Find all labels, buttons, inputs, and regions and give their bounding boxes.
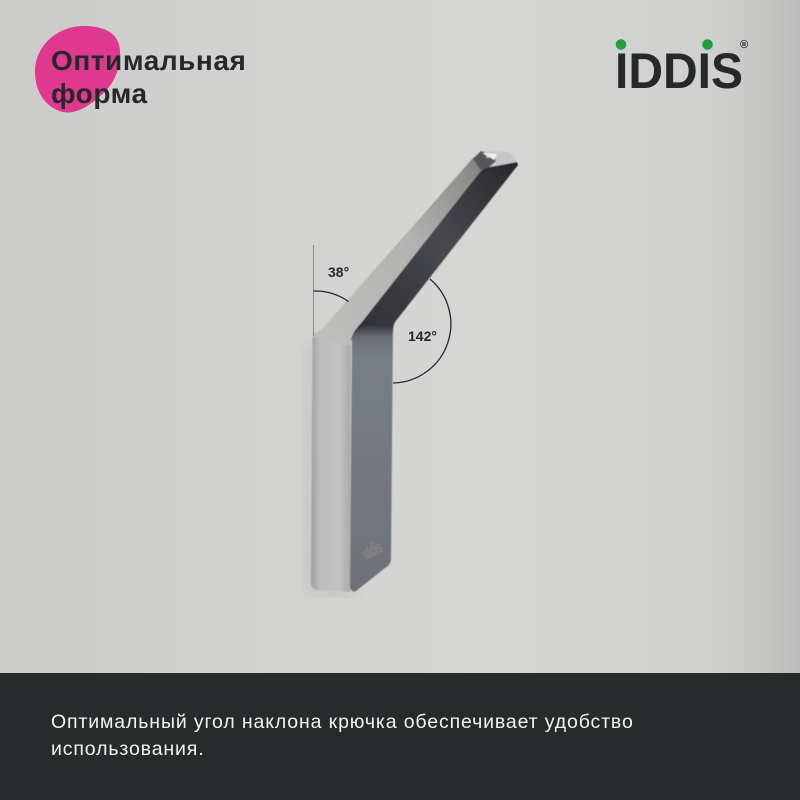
pink blob behind heading (35, 26, 120, 112)
angle annotation: 142 degrees: 142° (408, 328, 437, 344)
logo: IDDIS: ® (740, 39, 748, 51)
footer caption: использования. (51, 738, 205, 760)
hook dark arm face (351, 162, 518, 340)
hook side plate (311, 337, 351, 592)
logo: IDDIS: IDDIS (615, 43, 743, 99)
hook tip (476, 151, 517, 167)
hook engraved logo: iddis (359, 537, 386, 564)
hook front plate (350, 324, 393, 592)
angle annotation: 38 degrees (314, 245, 349, 336)
heading: Оптимальная (51, 45, 246, 76)
heading: форма (51, 78, 148, 109)
footer caption (51, 711, 634, 760)
hook (311, 151, 518, 592)
heading (51, 45, 246, 109)
angle annotation: 38 degrees: 38° (328, 264, 349, 280)
angle annotation: 142 degrees (393, 279, 451, 383)
footer band (0, 673, 800, 800)
hook brushed arm (312, 152, 490, 345)
footer caption: Оптимальный угол наклона крючка обеспечивает удобство (51, 711, 634, 733)
